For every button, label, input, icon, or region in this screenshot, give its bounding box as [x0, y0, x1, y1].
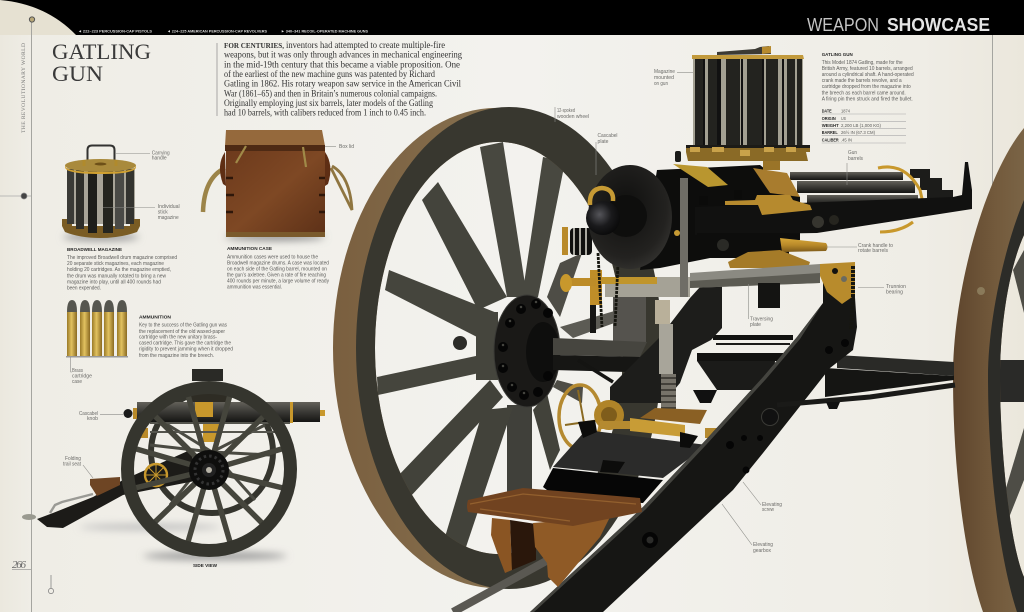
axle — [553, 338, 647, 357]
brass band — [753, 168, 800, 197]
seat rod — [453, 560, 548, 612]
text: Broadwell magazine: been expended. — [67, 285, 101, 291]
text: ammunition: cartridge with the new unitary brass- — [139, 335, 217, 341]
callout: traversing plate: plate — [750, 322, 761, 328]
elevating screw — [655, 300, 670, 324]
callout: stick magazine: magazine — [158, 215, 179, 221]
text: Gatling gun specification: crank made the barrels revolve, and a — [822, 78, 902, 84]
callout: crank handle: Crank handle to — [858, 243, 893, 249]
text: ammunition: AMMUNITION — [139, 315, 172, 321]
callout: elevating screw: Elevating — [762, 502, 782, 508]
text: Broadwell magazine: holding 20 cartridges. As the magazine emptied, — [67, 267, 171, 273]
handwheel — [559, 385, 601, 449]
callout: brass cartridge case: case — [72, 379, 82, 385]
text: Broadwell magazine: The improved Broadwell drum magazine comprised — [67, 255, 177, 261]
intro text: Gatling in 1862. His rotary weapon saw service in the American Civil — [224, 79, 462, 89]
trunnion bearing — [820, 262, 855, 304]
icon: cartridges — [66, 300, 128, 358]
section heading: SHOWCASE — [887, 14, 990, 35]
callout: brass cartridge case: Brass — [72, 368, 83, 374]
callout: magazine on gun: Magazine — [654, 69, 675, 75]
callout: trunnion bearing — [858, 284, 906, 296]
text: Gatling gun specification: around a cylindrical shaft. A hand-operated — [822, 72, 914, 78]
text: ammunition case: Ammunition cases were used to house the — [227, 254, 318, 260]
callout: stick magazine: Individual — [158, 204, 180, 210]
text: ammunition case — [227, 246, 329, 290]
large wheel — [333, 107, 662, 589]
intro text: Originally employing just six barrels, later models of the Gatling — [224, 98, 434, 108]
text: ammunition case: the gun’s axletree. Given a rate of fire reaching — [227, 272, 326, 278]
section heading: WEAPON — [807, 14, 879, 35]
intro text — [217, 40, 463, 118]
lower mechanism — [697, 233, 789, 258]
text: ammunition — [139, 315, 233, 359]
callout: cascabel knob: knob — [87, 416, 98, 422]
text: ammunition case: Broadwell magazine drums. A case was located — [227, 260, 329, 266]
text: Gatling gun specification — [822, 52, 914, 143]
grey rim section behind axle — [613, 297, 646, 343]
callout: elevating screw: screw — [762, 507, 774, 513]
gun magazine — [675, 46, 810, 162]
text: Gatling gun specification: This Model 1874 Gatling, made for the — [822, 60, 903, 66]
knob — [605, 195, 647, 237]
callout: crank handle — [826, 243, 893, 254]
traversing plate — [690, 264, 820, 288]
callout: crank handle: rotate barrels — [858, 248, 888, 254]
callout: elevating gearbox: Elevating — [753, 542, 773, 548]
barrels — [910, 169, 930, 178]
text: Gatling gun specification: WEIGHT — [822, 123, 839, 128]
callout: carrying handle: Carrying — [152, 150, 170, 156]
callout: traversing plate: Traversing — [750, 317, 773, 323]
main trail beam — [530, 265, 857, 612]
text: Gatling gun specification: CALIBER — [822, 138, 839, 143]
trail seat — [491, 518, 512, 573]
text: Gatling gun specification: US — [841, 116, 846, 121]
callout: carrying handle — [115, 150, 170, 161]
elevating gearbox — [640, 408, 707, 424]
bottom arrow mark — [48, 575, 54, 594]
text: Gatling gun specification: British Army, featured 10 barrels, arranged — [822, 66, 913, 72]
grey upright — [680, 178, 688, 297]
brass base — [728, 250, 810, 268]
text: Gatling gun specification: cartridge dropped from the magazine into — [822, 84, 911, 90]
intro text: in the mid-19th century that this became a viable proposition. One — [224, 59, 460, 69]
cross references — [78, 29, 368, 34]
callout: wooden wheel: wooden wheel — [557, 114, 589, 120]
intro text: weapons, but it was only through advances in mechanical engineering — [224, 50, 463, 60]
callout: folding trail seat: trail seat — [63, 462, 82, 468]
text: Gatling gun specification: 2,200 LB (1,000 KG) — [841, 123, 882, 128]
text: ammunition: cased cartridge. This gave the cartridge the — [139, 341, 231, 347]
spokes — [377, 142, 628, 550]
intro text: FOR CENTURIES, — [224, 42, 284, 50]
callout: cascabel plate — [596, 133, 618, 175]
cross references: ◄ 224–225 AMERICAN PERCUSSION-CAP REVOLVERS — [167, 29, 267, 34]
text: Broadwell magazine: BROADWELL MAGAZINE — [67, 247, 123, 253]
callout: brass cartridge case — [71, 357, 92, 385]
text: ammunition: Key to the success of the Gatling gun was — [139, 322, 227, 328]
callout: wooden wheel: 12-spoked — [557, 108, 575, 114]
icon: Broadwell magazine — [62, 146, 140, 241]
side view caption: SIDE VIEW — [193, 563, 217, 569]
callout: magazine on gun: on gun — [654, 81, 668, 87]
text: Gatling gun specification: .45 IN — [841, 138, 852, 143]
side view gun — [22, 369, 325, 560]
text: Broadwell magazine: magazine into play, until all 400 rounds had — [67, 279, 161, 285]
callout: cascabel plate: plate — [598, 139, 609, 145]
section heading — [807, 14, 990, 35]
callout: folding trail seat — [63, 456, 93, 478]
spring — [570, 228, 592, 255]
rim — [333, 108, 661, 588]
callout: cascabel knob: Cascabel — [79, 411, 98, 417]
callout: stick magazine: stick — [158, 209, 168, 215]
intro text: inventors had attempted to create multiple-fire — [286, 40, 445, 50]
callout: box lid — [325, 144, 354, 150]
text: ammunition case: on each side of the Gatling barrel, mounted on — [227, 266, 327, 272]
callout: folding trail seat: Folding — [65, 456, 81, 462]
text: Gatling gun specification: BARREL — [822, 130, 838, 135]
callout: traversing plate — [748, 284, 773, 328]
text: Gatling gun specification: GATLING GUN — [822, 52, 853, 58]
callout: gun barrels: barrels — [848, 156, 863, 162]
callout: box lid: Box lid — [339, 144, 354, 150]
title — [52, 39, 151, 86]
callout: magazine on gun: mounted — [654, 75, 674, 81]
header band — [0, 0, 1024, 35]
text: ammunition case: AMMUNITION CASE — [227, 246, 273, 252]
callout: elevating gearbox — [722, 504, 773, 554]
title: GATLING — [52, 39, 151, 64]
brass data plate — [673, 164, 728, 187]
text: Gatling gun specification: ORIGIN — [822, 116, 836, 121]
text: Gatling gun specification: 1874 — [841, 109, 851, 114]
text: ammunition case: 400 rounds per minute, a large volume of ready — [227, 278, 329, 284]
callout: cascabel knob — [79, 411, 123, 422]
right wheel — [953, 128, 1024, 612]
intro text: War (1861–65) and then in Britain’s numerous colonial campaigns. — [224, 88, 437, 98]
text: ammunition: rigidity to prevent jamming when it dropped — [139, 347, 233, 353]
callout: gun barrels — [847, 150, 863, 185]
crank handle — [780, 238, 828, 252]
callout: wooden wheel — [555, 107, 589, 122]
text: ammunition case: ammunition was essential. — [227, 284, 282, 290]
text: Broadwell magazine: the drum was manually rotated to bring a new — [67, 273, 166, 279]
callout: stick magazine — [103, 204, 180, 221]
cross references: ► 340–341 RECOIL-OPERATED MACHINE GUNS — [281, 29, 368, 34]
cross references: ◄ 222–223 PERCUSSION-CAP PISTOLS — [78, 29, 152, 34]
callout: magazine on gun — [654, 69, 693, 87]
text: Gatling gun specification: DATE — [822, 109, 832, 114]
rear brass and chains — [605, 277, 690, 297]
vertical chapter label: THE REVOLUTIONARY WORLD — [21, 43, 27, 133]
gun body — [560, 160, 972, 333]
text: ammunition: from the magazine into the breech. — [139, 353, 214, 359]
barrel housing — [640, 165, 800, 270]
frame rail — [695, 162, 972, 235]
elevating rod — [777, 385, 955, 405]
text: Gatling gun specification: 26½ IN (67.3 CM) — [841, 130, 876, 135]
callout: gun barrels: Gun — [848, 150, 857, 156]
callout: elevating gearbox: gearbox — [753, 548, 771, 554]
page number: 266 — [12, 559, 26, 571]
callout: cascabel plate: Cascabel — [598, 133, 618, 139]
text: Broadwell magazine — [67, 247, 177, 291]
callout: brass cartridge case: cartridge — [72, 374, 92, 380]
brass frame piece — [725, 195, 812, 215]
callout: elevating screw — [743, 482, 782, 513]
hub — [453, 295, 560, 407]
gun carriage — [453, 265, 955, 612]
rear horizontal beams — [697, 335, 793, 361]
text: ammunition: the replacement of the old waxed-paper — [139, 329, 225, 335]
intro text: had 10 barrels, with calibers reduced from 1 inch to 0.45 inch. — [224, 108, 426, 118]
text: Gatling gun specification: the breech as each barrel came around. — [822, 90, 906, 96]
icon: ammunition case — [203, 130, 352, 240]
callout: trunnion bearing: Trunnion — [886, 284, 906, 290]
title: GUN — [52, 61, 103, 86]
callout: carrying handle: handle — [152, 155, 167, 161]
intro text: of the earliest of the new machine guns was patented by Richard — [224, 69, 436, 79]
left cheek — [610, 285, 722, 403]
text: Broadwell magazine: 20 separate stick magazines, each magazine — [67, 261, 164, 267]
text: Gatling gun specification: A firing pin then struck and fired the bullet. — [822, 97, 913, 103]
callout: trunnion bearing: bearing — [886, 290, 903, 296]
